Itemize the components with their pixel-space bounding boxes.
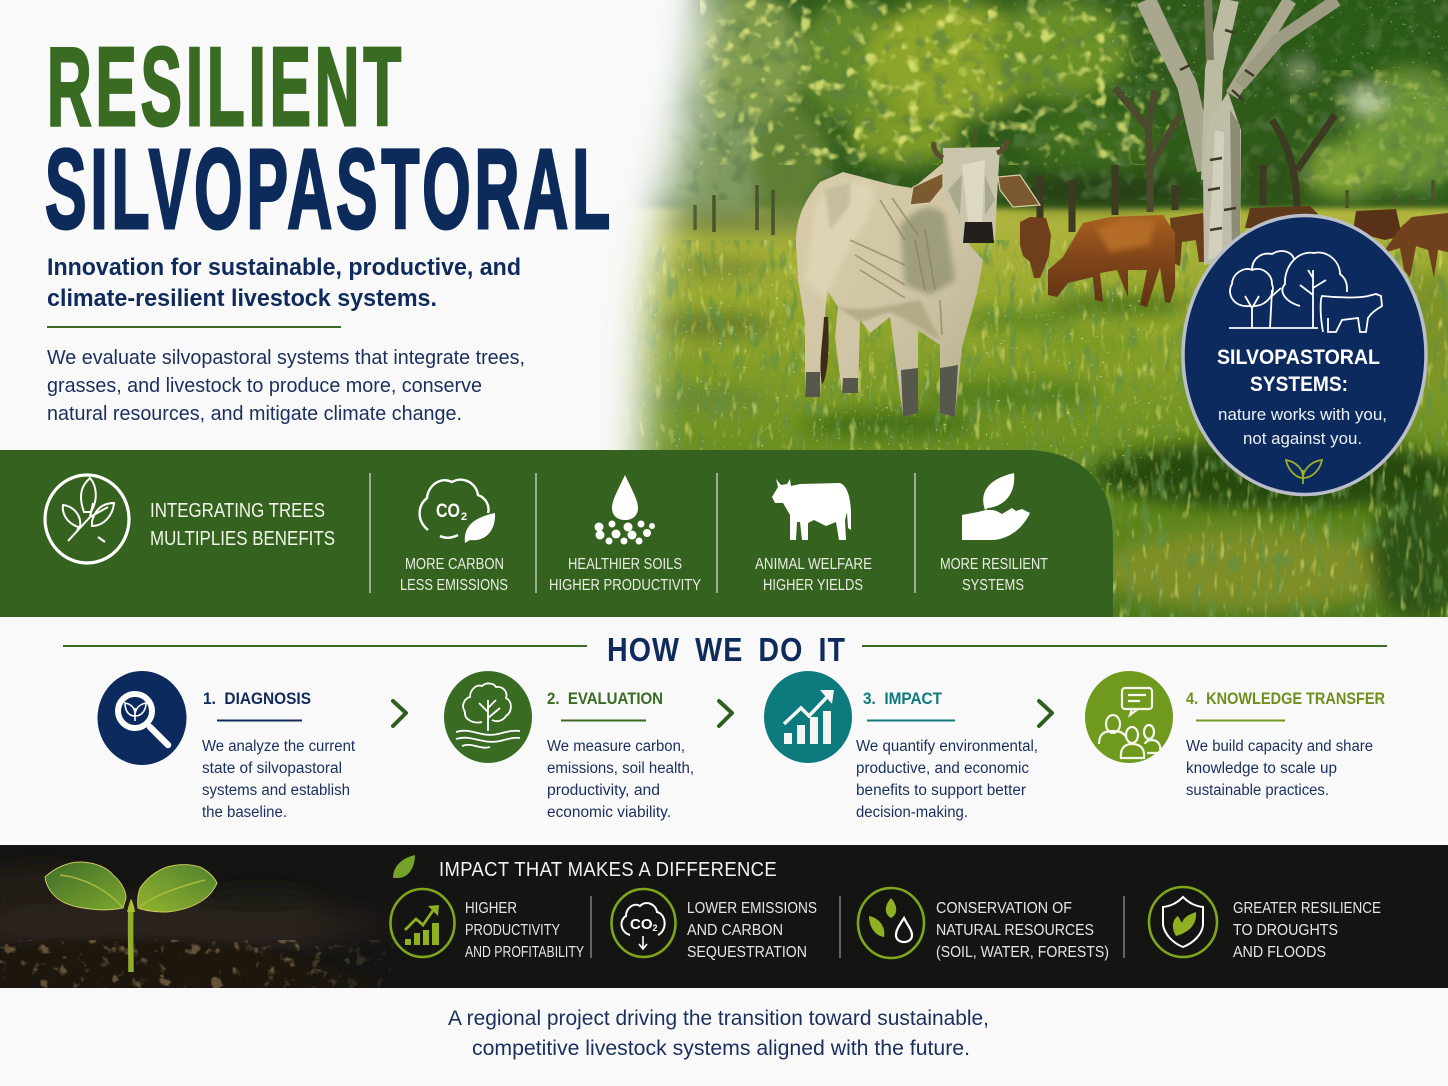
step 4: knowledge transfer: knowledge to scale up [1186, 760, 1337, 777]
arrow 1 [393, 701, 406, 726]
benefit labels: ANIMAL WELFARE [755, 556, 872, 573]
icon: leaf [393, 855, 415, 878]
callout tagline: nature works with you, [1218, 406, 1387, 424]
subtitle rule [47, 326, 341, 328]
icon: leaves and water drop [858, 888, 924, 958]
icon: CO2 cloud: 2 [652, 923, 658, 933]
benefit labels: SYSTEMS [962, 577, 1024, 594]
icon: CO2 cloud with leaf [420, 480, 495, 543]
closing statement [448, 1007, 989, 1060]
panel: impact band: AND FLOODS [1233, 944, 1326, 961]
panel: impact band: CONSERVATION OF [936, 900, 1072, 917]
panel: benefits band [0, 450, 1113, 617]
icon: productivity chart [390, 889, 454, 957]
callout heading: SYSTEMS: [1250, 373, 1348, 396]
step 1: diagnosis: systems and establish [202, 782, 350, 799]
panel: impact band: AND CARBON [687, 922, 783, 939]
step 2: evaluation: 2. EVALUATION [547, 689, 663, 708]
panel: impact band: LOWER EMISSIONS [687, 900, 817, 917]
panel: impact band: HIGHER [465, 900, 517, 917]
step 1: diagnosis: state of silvopastoral [202, 760, 342, 777]
callout: silvopastoral systems [1183, 216, 1426, 494]
step 2: evaluation [444, 671, 694, 821]
heading: how we do it: HOW WE DO IT [607, 631, 846, 668]
step 2: evaluation: productivity, and [547, 782, 660, 799]
panel: impact band [0, 845, 1448, 988]
main birch tree [1146, 0, 1337, 265]
panel: impact band: NATURAL RESOURCES [936, 922, 1094, 939]
callout tagline: not against you. [1243, 430, 1362, 448]
closing statement: competitive livestock systems aligned with the future. [472, 1037, 970, 1060]
step 3: impact: We quantify environmental, [856, 738, 1038, 755]
icon: cow [772, 479, 851, 540]
distant cattle [1020, 206, 1448, 278]
icon: trees and cow [1229, 251, 1382, 332]
icon: sprout [1286, 460, 1322, 484]
subtitle [47, 254, 521, 312]
grove trunks [695, 88, 1433, 235]
benefit labels: LESS EMISSIONS [400, 577, 508, 594]
step 3: impact: productive, and economic [856, 760, 1029, 777]
title [45, 25, 614, 252]
icon: leaf on hand [962, 473, 1030, 540]
callout heading: SILVOPASTORAL [1217, 346, 1380, 369]
panel: impact band: AND PROFITABILITY [465, 944, 584, 961]
closing statement: A regional project driving the transition toward sustainable, [448, 1007, 989, 1030]
benefit labels: MORE RESILIENT [940, 556, 1048, 573]
step 3: impact: 3. IMPACT [863, 689, 943, 708]
benefit labels: MORE CARBON [405, 556, 504, 573]
panel: impact band: (SOIL, WATER, FORESTS) [936, 944, 1109, 961]
heading: integrating trees [150, 500, 335, 550]
icon: CO2 cloud [612, 889, 676, 957]
icon: magnifier [98, 671, 186, 765]
arrow 3 [1039, 701, 1052, 726]
icon: CO2 cloud with leaf: 2 [461, 511, 467, 523]
heading: integrating trees: MULTIPLIES BENEFITS [150, 528, 335, 550]
grazing brown cow [1048, 215, 1175, 307]
icon: growth chart [764, 671, 852, 763]
panel: impact band: PRODUCTIVITY [465, 922, 560, 939]
step 3: impact: benefits to support better [856, 782, 1026, 799]
panel: impact band: GREATER RESILIENCE [1233, 900, 1381, 917]
title: SILVOPASTORAL [45, 126, 614, 252]
benefit labels: HIGHER PRODUCTIVITY [549, 577, 701, 594]
step 1: diagnosis: 1. DIAGNOSIS [203, 689, 311, 708]
intro paragraph: natural resources, and mitigate climate change. [47, 403, 462, 425]
benefit labels: HIGHER YIELDS [763, 577, 863, 594]
subtitle: climate-resilient livestock systems. [47, 285, 437, 312]
impact heading: IMPACT THAT MAKES A DIFFERENCE [439, 859, 777, 881]
icon: CO2 cloud with leaf: CO [436, 501, 460, 522]
step 1: diagnosis: the baseline. [202, 804, 287, 821]
cow head [943, 147, 1000, 242]
step 4: knowledge transfer: sustainable practices. [1186, 782, 1329, 799]
meadow shadow patches [630, 261, 1448, 620]
step 4: knowledge transfer: We build capacity and share [1186, 738, 1373, 755]
step 2: evaluation: emissions, soil health, [547, 760, 694, 777]
seedling in soil photo [0, 862, 400, 988]
icon: water drop and soil [594, 475, 655, 544]
title: RESILIENT [47, 25, 405, 149]
icon: people and speech bubble [1085, 671, 1173, 763]
photo: cattle grazing under trees [611, 0, 1448, 617]
benefit labels [400, 556, 1048, 594]
callout tagline [1218, 406, 1387, 448]
step 1: diagnosis [98, 671, 356, 821]
benefit labels: HEALTHIER SOILS [568, 556, 682, 573]
icon: shield with leaf [1149, 887, 1217, 957]
panel: impact band: TO DROUGHTS [1233, 922, 1338, 939]
step 2: evaluation: We measure carbon, [547, 738, 685, 755]
icon: tree and land [444, 671, 532, 763]
heading: integrating trees: INTEGRATING TREES [150, 500, 325, 522]
intro paragraph: We evaluate silvopastoral systems that integrate trees, [47, 347, 525, 369]
arrow 2 [719, 701, 732, 726]
step 3: impact: decision-making. [856, 804, 968, 821]
step 1: diagnosis: We analyze the current [202, 738, 356, 755]
step 3: impact [764, 671, 1038, 821]
step 4: knowledge transfer [1085, 671, 1385, 799]
white fade over the photo's left edge [440, 0, 712, 560]
icon: CO2 cloud: CO [630, 916, 652, 933]
panel: impact band: SEQUESTRATION [687, 944, 807, 961]
step 2: evaluation: economic viability. [547, 804, 671, 821]
intro paragraph: grasses, and livestock to produce more, conserve [47, 375, 482, 397]
white zebu cow [796, 140, 1040, 417]
icon: leaves in circle [45, 475, 129, 563]
callout heading [1217, 346, 1380, 396]
step 4: knowledge transfer: 4. KNOWLEDGE TRANSFER [1186, 689, 1385, 708]
subtitle: Innovation for sustainable, productive, and [47, 254, 521, 281]
intro paragraph [47, 347, 525, 425]
